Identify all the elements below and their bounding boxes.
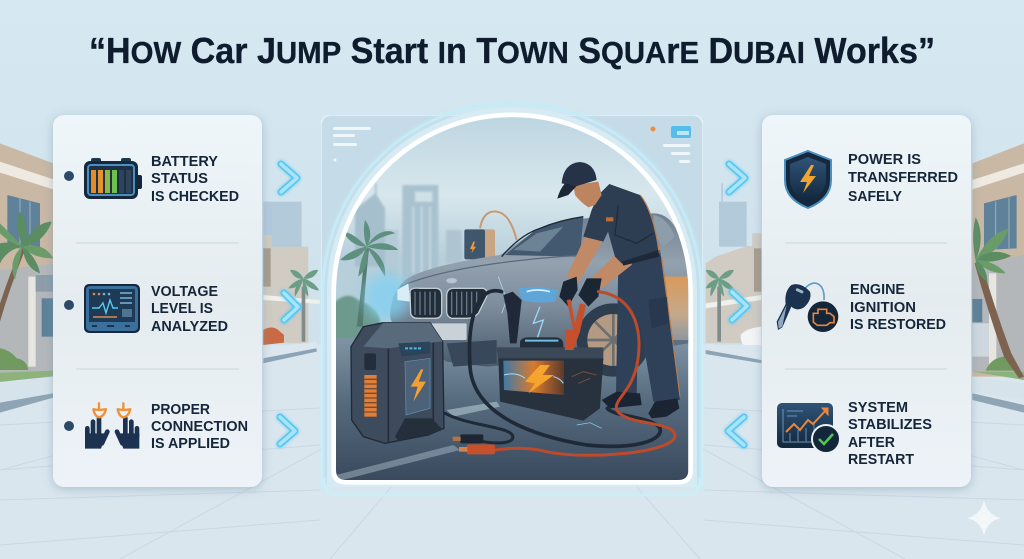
icon: battery	[84, 158, 142, 199]
label: engine ignition: IGNITION	[850, 300, 916, 316]
label: power transfer: SAFELY	[848, 189, 902, 205]
icon: key and engine light	[777, 283, 838, 332]
label: voltage level: LEVEL IS	[151, 301, 213, 317]
label: voltage level: VOLTAGE	[151, 284, 218, 300]
step: battery status	[64, 154, 239, 205]
label: system stabilizes: SYSTEM	[848, 400, 908, 416]
black clamp	[503, 292, 522, 343]
icon: shield with bolt	[785, 151, 831, 208]
label: engine ignition: IS RESTORED	[850, 317, 946, 333]
arrows: left chevrons	[280, 164, 298, 444]
label: system stabilizes: AFTER	[848, 435, 895, 451]
label: power transfer: TRANSFERRED	[848, 170, 958, 186]
label: system stabilizes: RESTART	[848, 452, 914, 468]
label: system stabilizes	[848, 400, 932, 468]
label: battery status: BATTERY	[151, 154, 218, 170]
mid buildings	[263, 202, 302, 248]
label: battery status	[151, 154, 239, 205]
glowing arch frame	[323, 103, 701, 495]
panel: left steps	[53, 115, 262, 487]
label: engine ignition: ENGINE	[850, 282, 905, 298]
panel: center illustration	[321, 103, 703, 515]
label: proper connection: CONNECTION	[151, 419, 248, 435]
label: battery status: STATUS	[151, 171, 208, 187]
step: system stabilizes	[777, 400, 932, 468]
icon: chart with check	[777, 403, 840, 453]
panel: right steps	[762, 115, 971, 487]
label: power transfer	[848, 152, 958, 205]
step: voltage level	[64, 284, 228, 335]
label: proper connection: PROPER	[151, 402, 210, 418]
step: engine ignition	[777, 282, 946, 333]
label: voltage level: ANALYZED	[151, 319, 228, 335]
right buildings	[706, 143, 1024, 413]
skyline	[333, 183, 462, 340]
arrows: right chevrons	[728, 164, 747, 445]
palm	[340, 220, 398, 327]
step: power transfer	[785, 151, 958, 208]
icon: sparkle watermark	[967, 500, 1001, 536]
label: engine ignition	[850, 282, 946, 333]
cable plugs	[453, 434, 495, 454]
jump starter box	[351, 323, 444, 443]
label: proper connection	[151, 402, 248, 452]
left buildings	[0, 143, 320, 413]
title: “HOW Car JUMP Start In TOWN SQUArE DUBAI Works”	[89, 30, 935, 71]
jumper cables	[445, 291, 675, 455]
car	[363, 213, 688, 377]
label: voltage level	[151, 284, 228, 335]
frame card	[321, 115, 703, 515]
small charger	[464, 212, 517, 259]
icon: voltage monitor	[84, 284, 140, 333]
label: system stabilizes: STABILIZES	[848, 417, 932, 433]
label: power transfer: POWER IS	[848, 152, 921, 168]
step: proper connection	[64, 402, 248, 452]
worker	[557, 162, 680, 418]
label: proper connection: IS APPLIED	[151, 436, 230, 452]
scene	[333, 113, 693, 483]
label: battery status: IS CHECKED	[151, 189, 239, 205]
icon: gloved hands	[85, 403, 139, 449]
car battery	[497, 337, 603, 421]
